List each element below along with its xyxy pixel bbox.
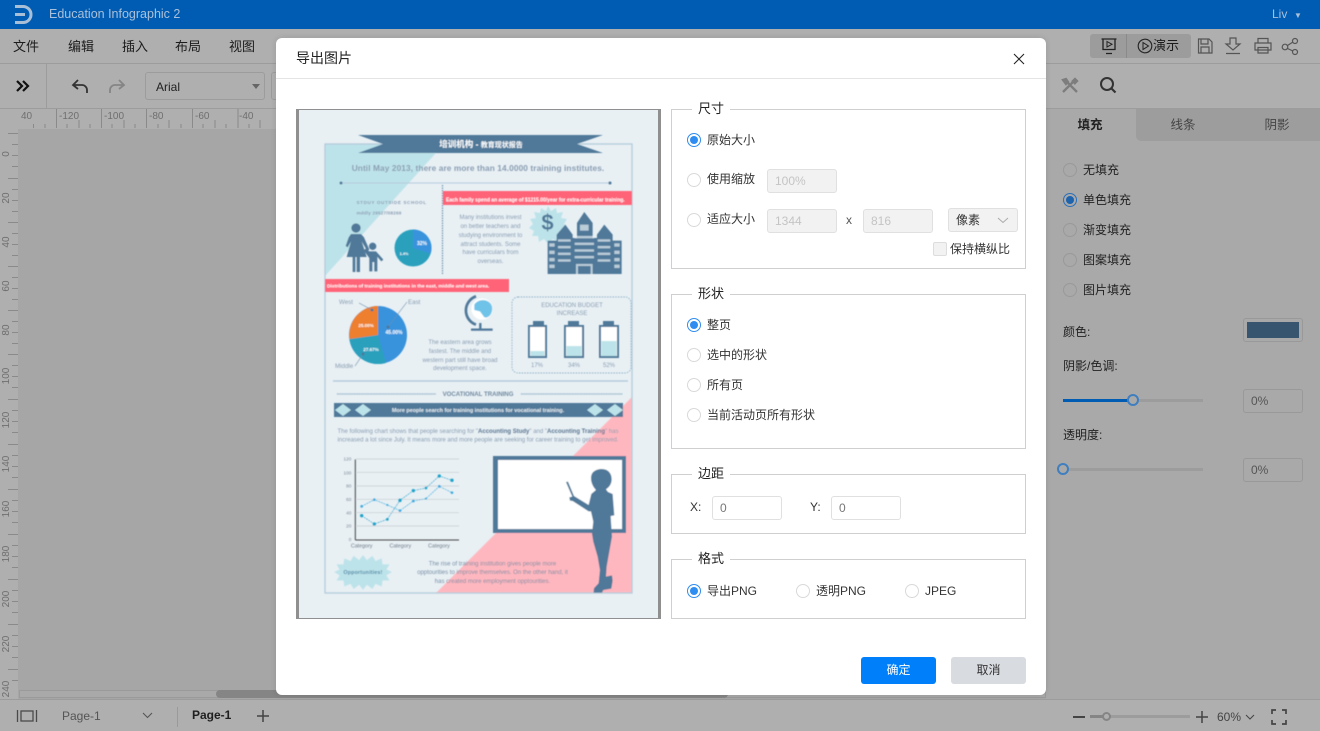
legend: format: 格式 [698, 551, 724, 566]
text: institutions invest: have curriculars from [462, 250, 519, 256]
vertical ruler: 120 [1, 411, 12, 428]
text: institutions invest: on better teachers and [460, 224, 521, 230]
menu items [13, 39, 255, 54]
title ribbon [358, 135, 603, 153]
study outside school text [356, 200, 427, 216]
line chart: Category [390, 543, 411, 549]
margin x [690, 496, 782, 520]
education budget box [512, 297, 631, 373]
dialog title: 导出图片 [296, 50, 352, 66]
icon: page panel [16, 710, 38, 722]
icons: save download print share [1198, 37, 1298, 56]
vertical ruler: 200 [1, 590, 12, 607]
text: institutions invest: Many institutions invest [459, 215, 522, 221]
vocational training heading: VOCATIONAL TRAINING [443, 391, 514, 398]
fill options: 单色填充 [1083, 193, 1131, 207]
line chart: 20 [346, 524, 352, 529]
vertical ruler [0, 129, 18, 699]
transparency label: 透明度: [1063, 428, 1102, 442]
margin y [810, 496, 901, 520]
zoom control: 60% [1217, 710, 1241, 724]
icon: globe [466, 296, 493, 330]
icon: close [1014, 54, 1024, 64]
content frame [325, 144, 632, 593]
document title: Education Infographic 2 [49, 7, 180, 21]
icon: undo [72, 80, 88, 93]
line chart: Category [351, 543, 373, 549]
active page tab: Page-1 [192, 708, 231, 722]
line chart: 80 [346, 484, 352, 489]
line chart: 120 [344, 457, 352, 462]
icon: expand [16, 80, 30, 92]
icon: tools [1061, 78, 1078, 93]
tab: line: 线条 [1170, 118, 1196, 132]
option: fit size: 像素 [956, 213, 980, 227]
horizontal scrollbar [19, 690, 1046, 698]
transparency value [1243, 458, 1303, 482]
teal background triangle [325, 144, 444, 276]
vocational banner [334, 403, 623, 417]
bottom status bar [0, 699, 1320, 731]
format options: 导出PNG [707, 584, 757, 598]
export dialog [276, 38, 1046, 695]
fill options: 无填充 [1083, 163, 1119, 177]
shape options: 所有页 [707, 378, 743, 392]
format section: JPEG [925, 584, 956, 598]
present button: 演示 [1153, 38, 1179, 53]
legend: size: 尺寸 [698, 101, 724, 116]
page selector: Page-1 [62, 709, 101, 723]
legend: margin [692, 466, 730, 482]
user menu: Liv ▼ [1272, 7, 1302, 21]
presentation board [493, 456, 626, 533]
option: fit size: 适应大小 [707, 212, 755, 226]
legend: format [692, 551, 730, 567]
option: fit size: 1344 [775, 214, 802, 228]
cancel button [951, 657, 1026, 684]
text: rise of training: has created more employment opptourities. [435, 579, 551, 585]
transparency slider [1057, 463, 1203, 475]
vertical ruler: 20 [1, 192, 12, 204]
option: scale: 使用缩放 [707, 172, 755, 186]
pie: regional distribution: East [408, 299, 421, 306]
text: chart description: increased a lot since July. It means more and more people are seeking for career training to get improved. [337, 438, 619, 444]
icon: mother and child [346, 223, 383, 272]
education budget box: 52% [603, 363, 616, 369]
margin y: 0 [839, 501, 846, 515]
menu items: 编辑 [68, 39, 94, 54]
title ribbon: 培训机构 - 教育现状报告 [439, 139, 523, 149]
red bar: distribution [325, 279, 509, 292]
vertical ruler: 40 [1, 236, 12, 248]
format options [687, 584, 956, 598]
text: eastern area: western part still have broad [421, 358, 498, 364]
text: eastern area: development space. [433, 366, 487, 372]
fill options: 图案填充 [1083, 253, 1131, 267]
opportunities burst: Opportunities! [343, 570, 383, 576]
line chart: 100 [344, 470, 352, 475]
pink background triangle [436, 397, 632, 593]
legend: shape [692, 286, 730, 302]
education budget box: 17% [531, 363, 544, 369]
menu items: 插入 [122, 39, 148, 54]
tab: shadow: 阴影 [1264, 118, 1290, 132]
font selector [145, 72, 265, 100]
horizontal ruler [0, 109, 276, 129]
vertical ruler: 220 [1, 635, 12, 652]
format section [671, 559, 1026, 619]
vocational banner: More people search for training institutions for vocational training. [392, 408, 565, 414]
page selector [62, 709, 152, 723]
format options: 透明PNG [816, 584, 866, 598]
headline: Until May 2013, there are more than 14.0000 training institutes. [352, 163, 604, 173]
font selector: Arial [156, 80, 180, 94]
text: rise of training [417, 562, 568, 585]
icon: dollar burst: $ [541, 210, 554, 235]
opportunities burst [334, 555, 392, 590]
line chart: 40 [346, 510, 352, 515]
icon: add page [257, 710, 269, 722]
icon: redo [109, 80, 126, 93]
line chart [344, 457, 459, 549]
icon: school building [548, 212, 622, 274]
margin x: 0 [720, 501, 727, 515]
menu bar [0, 29, 1320, 64]
icon: fullscreen [1271, 709, 1287, 725]
vertical ruler: 140 [1, 455, 12, 472]
shape options: 当前活动页所有形状 [707, 408, 815, 422]
line chart: 60 [346, 497, 352, 502]
option: fit size: 816 [871, 214, 891, 228]
right property panel [1046, 109, 1320, 699]
shape options: 整页 [707, 318, 731, 332]
text: chart description [337, 429, 619, 444]
vertical ruler: 240 [1, 680, 12, 697]
vertical ruler: 60 [1, 280, 12, 292]
tab strip [1136, 109, 1320, 141]
text: institutions invest: studying environment to [459, 233, 523, 239]
pie: regional distribution [335, 299, 421, 370]
red bar: distribution: Distributions of training institutions in the east, middle and west area. [327, 284, 490, 290]
line chart: 0 [349, 537, 352, 542]
shape section [671, 294, 1026, 449]
pie: regional distribution: 25.00% [358, 323, 374, 328]
margin section [671, 474, 1026, 534]
colour swatch [1243, 318, 1303, 342]
option: fit size: x [846, 213, 852, 227]
fill options: 图片填充 [1083, 283, 1131, 297]
cancel button: 取消 [976, 663, 1000, 677]
fill options [1063, 163, 1131, 297]
size section [671, 109, 1026, 269]
colour label: 颜色: [1063, 325, 1090, 339]
text: institutions invest [459, 215, 523, 265]
text: rise of training: opptourities to improve themselves. On the other hand, it [417, 570, 568, 576]
shade value: 0% [1251, 394, 1268, 408]
shape options [687, 318, 815, 422]
menu items: 视图 [229, 39, 255, 54]
option: scale [687, 169, 837, 193]
text: institutions invest: attract students. Some [460, 242, 521, 248]
toolbar [0, 64, 1320, 109]
shade slider [1063, 394, 1203, 406]
option: original size: 原始大小 [707, 133, 755, 147]
menu items: 文件 [13, 39, 39, 54]
pie: study outside school: 1.4% [400, 252, 409, 256]
pie: regional distribution: West [339, 299, 353, 306]
confirm button: 确定 [886, 663, 910, 677]
confirm button [861, 657, 936, 684]
text: chart description: The following chart shows that people searching for "Accounting Study" and "Accounting Training" has [338, 429, 618, 435]
text: eastern area: fastest. The middle and [429, 349, 491, 355]
horizontal ruler: -60 [195, 111, 209, 122]
vertical ruler: 180 [1, 545, 12, 562]
horizontal ruler: -100 [104, 111, 124, 122]
red bar: spending: Each family spend an average of $1215.00/year for extra-curricular training. [446, 198, 625, 204]
red bar: spending [443, 191, 632, 205]
fill options: 渐变填充 [1083, 223, 1131, 237]
battery: 52% [600, 321, 618, 357]
shade value [1243, 389, 1303, 413]
vertical ruler: 80 [1, 324, 12, 336]
battery: 34% [565, 321, 583, 357]
option: scale: 100% [775, 174, 806, 188]
teacher silhouette [566, 469, 614, 593]
shape options: 选中的形状 [707, 348, 767, 362]
shade label: 阴影/色调: [1063, 359, 1118, 373]
keep aspect ratio: 保持横纵比 [950, 242, 1010, 256]
education budget box: 34% [568, 363, 581, 369]
horizontal ruler: -40 [239, 111, 253, 122]
menu items: 布局 [175, 39, 201, 54]
transparency value: 0% [1251, 463, 1268, 477]
line chart: Category [428, 543, 450, 549]
option: fit size [687, 208, 1018, 233]
vertical ruler: 160 [1, 500, 12, 517]
pie: study outside school: 32% [417, 241, 428, 247]
headline divider [340, 182, 612, 184]
present button [1090, 34, 1191, 58]
text: institutions invest: overseas. [477, 259, 504, 265]
education budget box: EDUCATION BUDGET [541, 303, 603, 309]
infographic preview [296, 109, 661, 619]
legend: shape: 形状 [698, 286, 724, 301]
study outside school text: STDUY OUTSIDE SCHOOL [356, 200, 427, 205]
text: eastern area: The eastern area grows [428, 340, 492, 346]
pie: regional distribution: Middle [335, 363, 354, 370]
legend: size [692, 101, 730, 117]
horizontal ruler: -80 [149, 111, 163, 122]
font size selector [271, 72, 291, 100]
horizontal ruler: -120 [59, 111, 79, 122]
margin x: X: [690, 500, 701, 514]
margin y: Y: [810, 500, 821, 514]
text: rise of training: The rise of training institution gives people more [429, 562, 557, 568]
pie: regional distribution: 27.67% [363, 347, 379, 352]
pie: regional distribution: 45.00% [386, 330, 403, 336]
study outside school text: mddly 29527/08269 [356, 210, 402, 216]
icon: app logo [15, 5, 32, 24]
legend: margin: 边距 [698, 466, 724, 481]
education budget box: INCREASE [557, 311, 587, 317]
vertical ruler: 100 [1, 367, 12, 384]
vertical ruler: 0 [1, 151, 12, 157]
text: eastern area [421, 340, 498, 372]
battery: 17% [529, 321, 546, 357]
pie: study outside school [394, 230, 432, 266]
tab: fill: 填充 [1077, 118, 1102, 132]
zoom control [1073, 710, 1254, 724]
horizontal ruler: 40 [21, 111, 32, 122]
icon: dollar burst [529, 206, 568, 244]
title bar [0, 0, 1320, 29]
icon: search [1100, 77, 1116, 94]
